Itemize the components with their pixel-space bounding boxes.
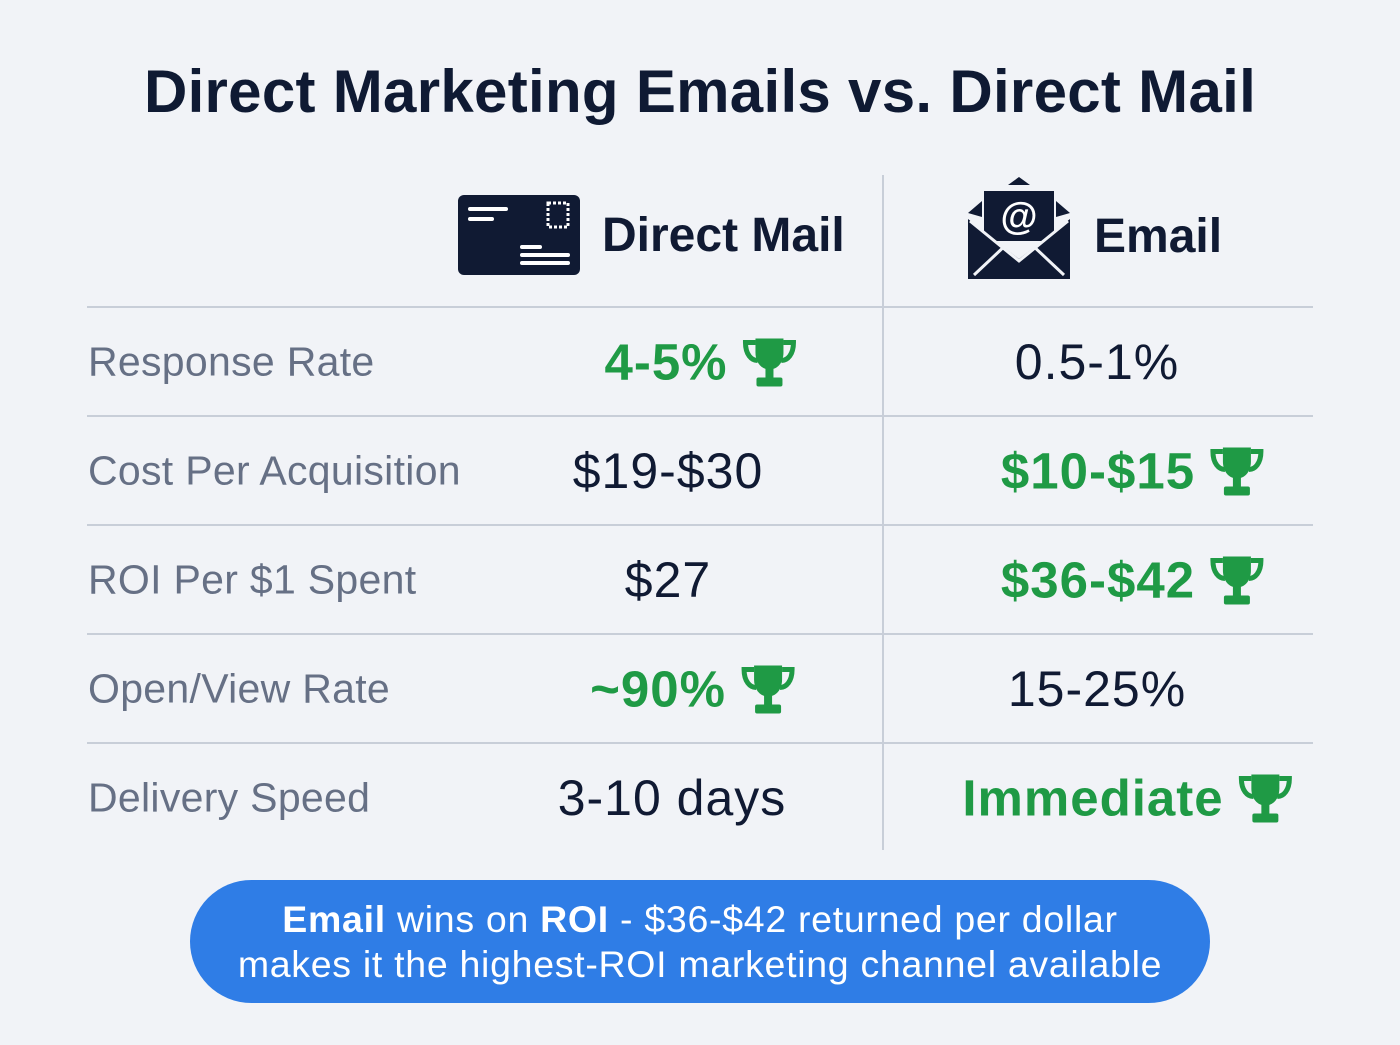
icon: envelope: @ xyxy=(1000,196,1038,238)
icon: envelope xyxy=(968,177,1070,279)
callout: makes it the highest-ROI marketing channel available xyxy=(238,943,1162,985)
text: $36-$42 xyxy=(1001,552,1195,608)
header: email xyxy=(968,177,1222,279)
icon: postcard xyxy=(458,195,580,275)
text: Delivery Speed xyxy=(88,774,370,820)
header: direct mail: Direct Mail xyxy=(602,208,845,262)
text: 15-25% xyxy=(1008,661,1186,717)
text: $10-$15 xyxy=(1001,442,1195,500)
divider vertical xyxy=(882,175,884,850)
text: $19-$30 xyxy=(573,443,763,499)
text: ROI Per $1 Spent xyxy=(88,556,416,602)
row: delivery speed xyxy=(88,770,1292,826)
row: cost per acquisition xyxy=(88,442,1264,500)
callout: Email wins on ROI - $36-$42 returned per dollar xyxy=(282,898,1118,940)
row: response rate xyxy=(88,334,1179,390)
text: Response Rate xyxy=(88,338,375,384)
text: Cost Per Acquisition xyxy=(88,448,461,494)
text: 4-5% xyxy=(604,334,728,390)
header: direct mail xyxy=(458,195,845,275)
text: $27 xyxy=(625,552,711,608)
text: 0.5-1% xyxy=(1015,334,1179,390)
row: open rate xyxy=(88,660,1186,718)
header: email: Email xyxy=(1094,210,1222,262)
row: roi xyxy=(88,552,1264,608)
text: 3-10 days xyxy=(558,770,786,826)
text: ~90% xyxy=(590,660,726,718)
text: Immediate xyxy=(962,770,1224,826)
text: Open/View Rate xyxy=(88,666,390,712)
title: Direct Marketing Emails vs. Direct Mail xyxy=(144,58,1256,125)
callout xyxy=(190,880,1210,1003)
